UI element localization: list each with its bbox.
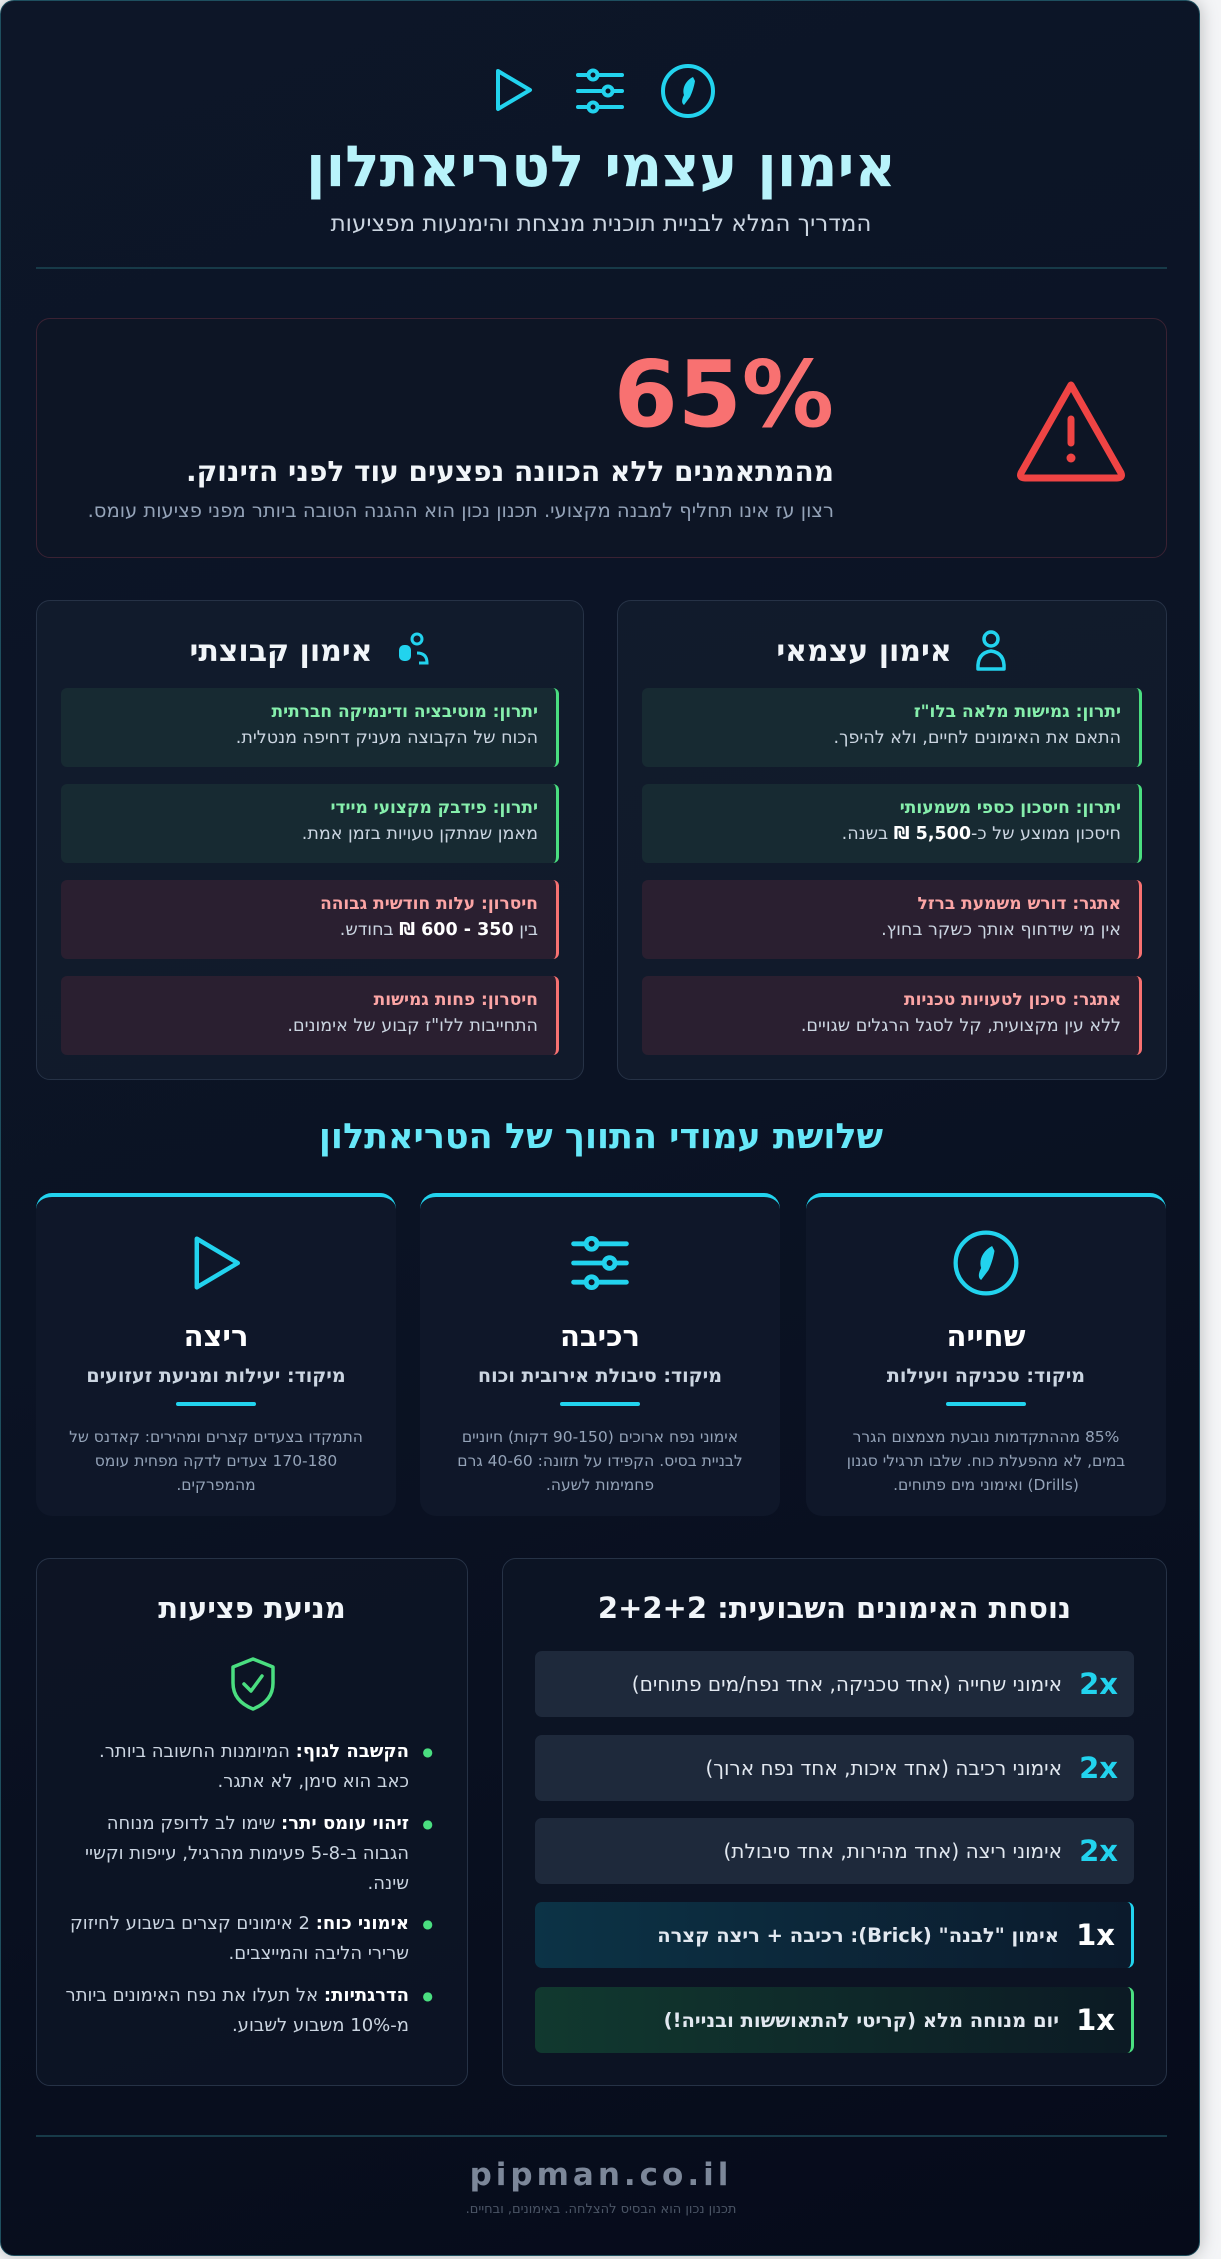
item: יתרון: פידבק מקצועי מיידי (330, 798, 538, 818)
panel: injury prevention (36, 1558, 468, 2086)
subtitle: המדריך המלא לבניית תוכנית מנצחת והימנעות מפציעות (331, 211, 871, 237)
item (642, 784, 1142, 863)
row: bike: 2x (1079, 1751, 1118, 1785)
bullet: הדרגתיות: אל תעלו את נפח האימונים ביותר מ-10% משבוע לשבוע. (66, 1985, 409, 2036)
panel: weekly formula (502, 1558, 1167, 2086)
item: חיסרון: פחות גמישות (374, 990, 538, 1010)
item: חיסרון: עלות חודשית גבוהה (320, 894, 538, 914)
stat heading: מהמתאמנים ללא הכוונה נפצעים עוד לפני הזינוק. (186, 455, 834, 488)
panel: injury prevention: ● (423, 1917, 433, 1931)
item: יתרון: מוטיבציה ודינמיקה חברתית (272, 702, 538, 722)
panel: group training (36, 600, 584, 1080)
item (61, 880, 559, 959)
bullet: זיהוי עומס יתר: שימו לב לדופק מנוחה הגבוה ב-5-8 פעימות מהרגיל, עייפות וקשיי שינה. (85, 1813, 409, 1894)
item (61, 976, 559, 1055)
item: אתגר: דורש משמעת ברזל (918, 894, 1121, 914)
row: rest: יום מנוחה מלא (קריטי להתאוששות ובנייה!) (664, 2008, 1059, 2032)
item (61, 784, 559, 863)
item: ללא עין מקצועית, קל לסגל הרגלים שגויים. (801, 1016, 1121, 1036)
item: בין 350 - 600 ₪ בחודש. (340, 920, 538, 940)
row: bike (535, 1735, 1134, 1801)
heading: self training (776, 630, 1006, 671)
icon: swim (661, 64, 715, 118)
panel: injury prevention: ● (423, 1745, 433, 1759)
row: bike: אימוני רכיבה (אחד איכות, אחד נפח ארוך) (705, 1756, 1062, 1780)
item: חיסכון ממוצע של כ-5,500 ₪ בשנה. (842, 824, 1121, 844)
icon: swim (954, 1230, 1018, 1296)
item: הכוח של הקבוצה מעניק דחיפה מנטלית. (236, 728, 538, 748)
pillar: bike: מיקוד: סיבולת אירובית וכוח (478, 1365, 722, 1387)
item: התחייבות ללו"ז קבוע של אימונים. (287, 1016, 538, 1036)
panel: self training (617, 600, 1167, 1080)
icon: shield (231, 1657, 275, 1711)
heading: formula: נוסחת האימונים השבועית: 2+2+2 (598, 1591, 1071, 1625)
pillar: swim (806, 1193, 1166, 1516)
bullet: הקשבה לגוף: המיומנות החשובה ביותר. כאב הוא סימן, לא אתגר. (99, 1741, 409, 1792)
header icons (496, 64, 715, 118)
icon: warning (1017, 382, 1125, 482)
row: run: אימוני ריצה (אחד מהירות, אחד סיבולת) (724, 1839, 1062, 1863)
row: run (535, 1818, 1134, 1884)
icon: play (194, 1236, 240, 1290)
pillar: bike: רכיבה (560, 1319, 640, 1353)
row: run: 2x (1079, 1834, 1118, 1868)
pillar: swim: 85% מההתקדמות נובעת מצמצום הגרר במים, לא מהפעלת כוח. שלבו תרגילי סגנון (Drills) ואימוני מים פתוחים. (847, 1428, 1125, 1494)
row: brick (535, 1902, 1134, 1968)
item: מאמן שמתקן טעויות בזמן אמת. (302, 824, 538, 844)
pillar: run: מיקוד: יעילות ומניעת זעזועים (86, 1365, 346, 1387)
icon: sliders (576, 68, 624, 114)
row: swim (535, 1651, 1134, 1717)
row: brick: אימון "לבנה" (Brick): רכיבה + ריצה קצרה (657, 1924, 1059, 1946)
item: יתרון: גמישות מלאה בלו"ז (914, 702, 1121, 722)
title: אימון עצמי לטריאתלון (306, 134, 896, 200)
heading: group training: אימון קבוצתי (189, 634, 373, 668)
icon: group (399, 632, 428, 664)
stat text: רצון עז אינו תחליף למבנה מקצועי. תכנון נכון הוא ההגנה הטובה ביותר מפני פציעות עומס. (88, 499, 834, 522)
pillar: bike (420, 1193, 780, 1516)
row: swim: אימוני שחייה (אחד טכניקה, אחד נפח/מים פתוחים) (632, 1672, 1062, 1696)
heading: self training: אימון עצמאי (776, 634, 952, 668)
panel: injury prevention: ● (423, 1989, 433, 2003)
item: אתגר: סיכון לטעויות טכניות (904, 990, 1121, 1010)
pillar: run (36, 1193, 396, 1516)
pillar: swim: מיקוד: טכניקה ויעילות (887, 1365, 1085, 1387)
section heading: pillars: שלושת עמודי התווך של הטריאתלון (319, 1117, 883, 1157)
row: rest (535, 1987, 1134, 2053)
panel: injury prevention: ● (423, 1817, 433, 1831)
item: אין מי שידחוף אותך כשקר בחוץ. (881, 920, 1121, 940)
pillar: run: ריצה (184, 1319, 248, 1353)
item (642, 688, 1142, 767)
item (642, 976, 1142, 1055)
heading: injury prevention: מניעת פציעות (158, 1591, 346, 1625)
icon: play (496, 69, 532, 112)
icon: person (976, 630, 1006, 671)
footer brand: pipman.co.il (470, 2157, 732, 2193)
pillar: bike: אימוני נפח ארוכים (90-150 דקות) חיוניים לבניית בסיס. הקפידו על תזונה: 40-60 גרם פחמימות לשעה. (457, 1428, 743, 1494)
icon: sliders (571, 1236, 629, 1290)
item: התאם את האימונים לחיים, ולא להיפך. (834, 728, 1121, 748)
row: swim: 2x (1079, 1667, 1118, 1701)
pillar: run: התמקדו בצעדים קצרים ומהירים: קאדנס של 170-180 צעדים לדקה מפחית עומס מהמפרקים. (69, 1428, 363, 1494)
row: rest: 1x (1076, 2003, 1115, 2037)
footer tagline: תכנון נכון הוא הבסיס להצלחה. באימונים, ובחיים. (466, 2202, 736, 2217)
item (61, 688, 559, 767)
row: brick: 1x (1076, 1918, 1115, 1952)
item (642, 880, 1142, 959)
pillar: swim: שחייה (947, 1319, 1025, 1353)
item: יתרון: חיסכון כספי משמעותי (900, 798, 1121, 818)
panel: stat callout (36, 318, 1167, 558)
bullet: אימוני כוח: 2 אימונים קצרים בשבוע לחיזוק שרירי הליבה והמייצבים. (70, 1913, 409, 1964)
stat number: 65% (614, 341, 834, 448)
